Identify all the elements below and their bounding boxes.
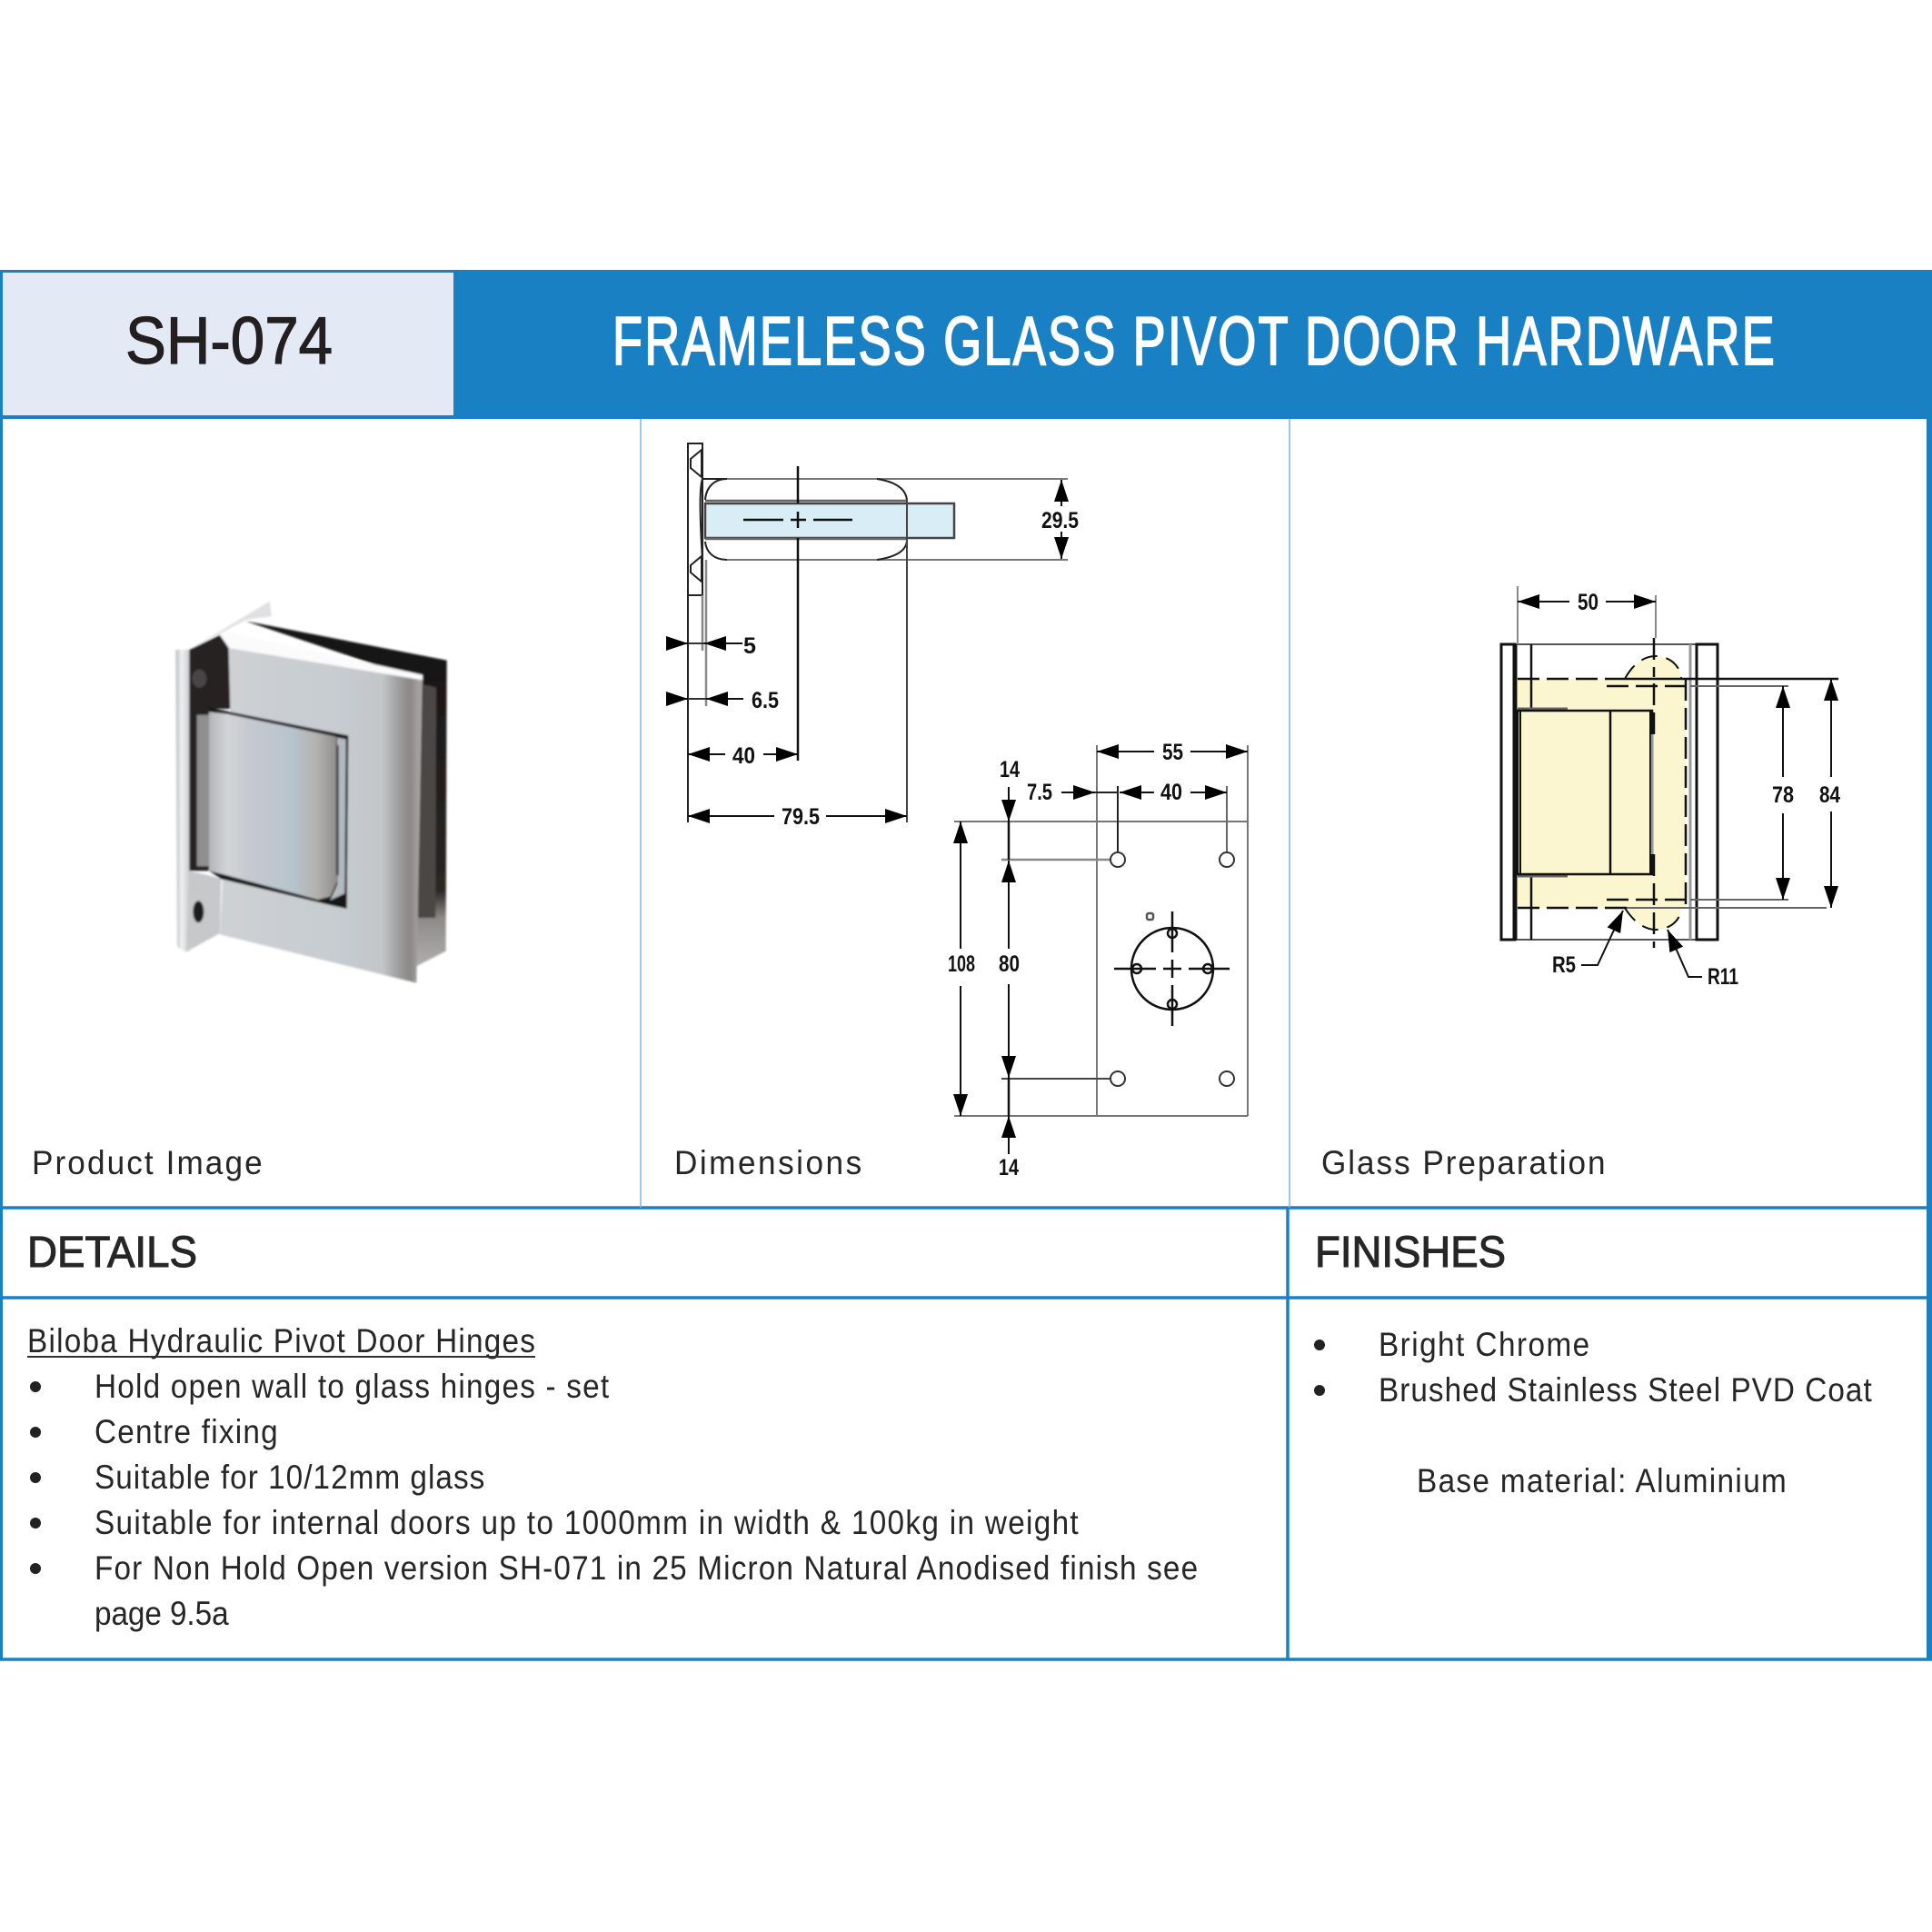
glass outline drawing [1501, 638, 1838, 948]
lock circle [1114, 911, 1230, 1026]
product code: SH-074 [125, 304, 333, 378]
dimension 40 [688, 743, 798, 769]
dimension 6.5 [666, 688, 779, 713]
details list: Centre fixing [95, 1413, 278, 1450]
dimension 7.5: 7.5 [1027, 780, 1052, 805]
dimension 50 [1518, 586, 1656, 644]
details list [27, 1322, 1198, 1632]
dimension 14 top: 14 [1000, 757, 1020, 782]
side view drawing [666, 443, 1079, 830]
dimension 5 [666, 633, 756, 659]
dimension 55: 55 [1162, 740, 1183, 765]
finishes list: Brushed Stainless Steel PVD Coat [1379, 1371, 1872, 1409]
dimension 29.5: 29.5 [1041, 508, 1079, 533]
glass section [705, 503, 954, 538]
details list: For Non Hold Open version SH-071 in 25 Micron Natural Anodised finish see [95, 1549, 1198, 1587]
finishes list: Base material: Aluminium [1417, 1462, 1787, 1499]
dimension 14 bottom [999, 1116, 1019, 1180]
plate drawing [948, 740, 1248, 1180]
radius R11 [1668, 930, 1738, 990]
dimension 14 bottom: 14 [999, 1155, 1019, 1180]
caption: Dimensions [674, 1143, 861, 1181]
product code box [3, 273, 453, 415]
header bar [0, 270, 1932, 419]
dashed cut-out lines [1518, 679, 1690, 908]
dimension 40: 40 [1160, 780, 1182, 805]
radius R11: R11 [1708, 964, 1738, 990]
details list: Biloba Hydraulic Pivot Door Hinges [27, 1322, 535, 1359]
dimension 40 [1120, 780, 1227, 805]
cut-out shading [1518, 656, 1686, 930]
dimension 40: 40 [732, 743, 755, 769]
title: FRAMELESS GLASS PIVOT DOOR HARDWARE [612, 303, 1775, 379]
caption: Product Image [32, 1143, 263, 1181]
heading: details: DETAILS [27, 1229, 197, 1277]
dimension 50: 50 [1578, 590, 1598, 615]
dimension 79.5: 79.5 [782, 804, 820, 830]
dimension 6.5: 6.5 [752, 688, 779, 713]
radius R5: R5 [1552, 952, 1576, 978]
hinge body outline [1518, 711, 1652, 874]
dimension 80: 80 [999, 951, 1020, 977]
dimension 84: 84 [1819, 782, 1840, 808]
heading: finishes: FINISHES [1315, 1229, 1506, 1277]
panel: dimensions [666, 443, 1248, 1181]
panel: glass preparation [1321, 586, 1840, 1181]
caption: Glass Preparation [1321, 1143, 1606, 1181]
details list: page 9.5a [95, 1595, 229, 1632]
details list: Suitable for 10/12mm glass [95, 1459, 484, 1496]
dimension 14 top [1000, 757, 1020, 822]
panel: product image [32, 602, 447, 1181]
details list: Suitable for internal doors up to 1000mm in width & 100kg in weight [95, 1504, 1079, 1541]
radius R5 [1552, 911, 1623, 978]
dimension 78: 78 [1772, 782, 1794, 808]
finishes list: Bright Chrome [1379, 1326, 1589, 1363]
dimension 5: 5 [743, 633, 756, 659]
dimension 7.5 [1027, 780, 1118, 805]
product photo: hinge [175, 602, 447, 983]
details list: Hold open wall to glass hinges - set [95, 1368, 609, 1405]
dimension 108: 108 [948, 951, 975, 977]
finishes list [1314, 1326, 1872, 1499]
table frame [0, 419, 1932, 1661]
dimension 29.5 [1041, 480, 1079, 559]
